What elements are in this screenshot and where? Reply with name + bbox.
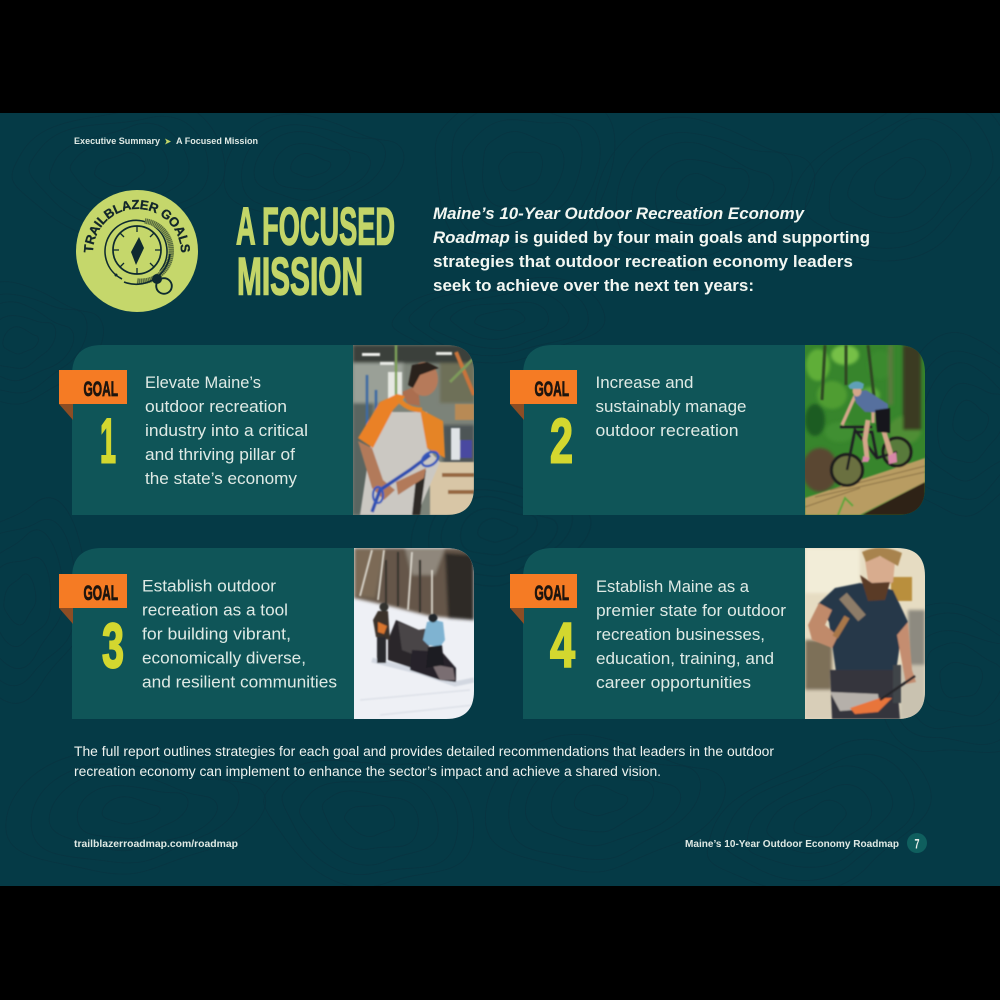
goal 1 text: Elevate Maine’s [145,373,261,392]
photo: worker holding lacrosse stick [353,345,474,515]
goal 3 text: economically diverse, [142,648,306,668]
badge curved label: TRAILBLAZER GOALS [84,200,190,252]
intro text: Roadmap is guided by four main goals and supporting [433,228,870,247]
goal 3 text [142,576,337,692]
goal 1 text: the state’s economy [145,469,298,488]
intro text: Maine’s 10-Year Outdoor Recreation Economy [433,204,805,223]
intro text: strategies that outdoor recreation economy leaders [433,252,853,271]
goal 3 text: Establish outdoor [142,576,276,596]
breadcrumb: Executive Summary [74,136,160,146]
title [236,198,395,306]
bottom black bar [0,886,1000,1000]
closing paragraph: The full report outlines strategies for each goal and provides detailed recommendations that leaders in the outdoor [74,744,775,759]
breadcrumb [74,136,258,146]
goal 4 text [596,577,786,692]
top black bar [0,0,1000,113]
goal 4 text: recreation businesses, [596,625,765,644]
panel: goal 3 [59,548,474,719]
goal 1 flag [59,370,127,420]
goal 2 text: sustainably manage [596,397,746,416]
goal 2 number: 2 [550,406,573,476]
footer report title: Maine’s 10-Year Outdoor Economy Roadmap [685,839,899,850]
goal 2 text: outdoor recreation [596,421,738,440]
photo: snowmobilers in snowy forest [354,548,474,719]
goal 3 text: for building vibrant, [142,624,291,644]
goal 1 flag: GOAL [84,377,118,401]
goal 1 text [145,373,308,488]
compass icon [105,220,172,294]
intro text [433,204,870,295]
panel: goal 2 [510,345,925,515]
goal 4 flag [510,574,577,624]
goal 3 text: and resilient communities [142,672,337,692]
goal 2 flag: GOAL [534,377,569,401]
panel: goal 1: 1 [100,406,116,476]
panel: goal 1 [59,345,474,515]
breadcrumb: A Focused Mission [176,136,258,146]
title: MISSION [237,248,363,306]
panel: goal 4 [510,548,925,719]
goal 2 text: Increase and [596,373,694,392]
goal 4 flag: GOAL [534,581,569,605]
goal 2 flag [510,370,577,420]
page number [907,833,927,853]
goal 4 text: career opportunities [596,673,751,692]
goal 3 flag [59,574,127,624]
goal 3 text: recreation as a tool [142,600,288,620]
footer link: trailblazerroadmap.com/roadmap [74,839,238,850]
goal 4 text: Establish Maine as a [596,577,750,596]
photo: blacksmith with hammer [805,548,925,719]
photo: mountain biker on boardwalk [802,345,925,515]
goal 3 number: 3 [102,612,124,682]
goal 3 flag: GOAL [84,581,118,605]
title: A FOCUSED [236,198,395,256]
goal 4 text: education, training, and [596,649,774,668]
man shirt [360,412,440,515]
page number: 7 [914,836,920,852]
goal 1 text: and thriving pillar of [145,445,295,464]
badge: trailblazer goals compass [76,190,198,312]
page background [0,113,1000,886]
goal 4 number: 4 [550,611,575,681]
goal 1 text: industry into a critical [145,421,308,440]
closing paragraph [74,744,775,779]
goal 4 text: premier state for outdoor [596,601,786,620]
intro text: seek to achieve over the next ten years: [433,276,754,295]
goal 1 text: outdoor recreation [145,397,287,416]
goal 2 text [596,373,746,440]
closing paragraph: recreation economy can implement to enhance the sector’s impact and achieve a shared vision. [74,764,661,779]
